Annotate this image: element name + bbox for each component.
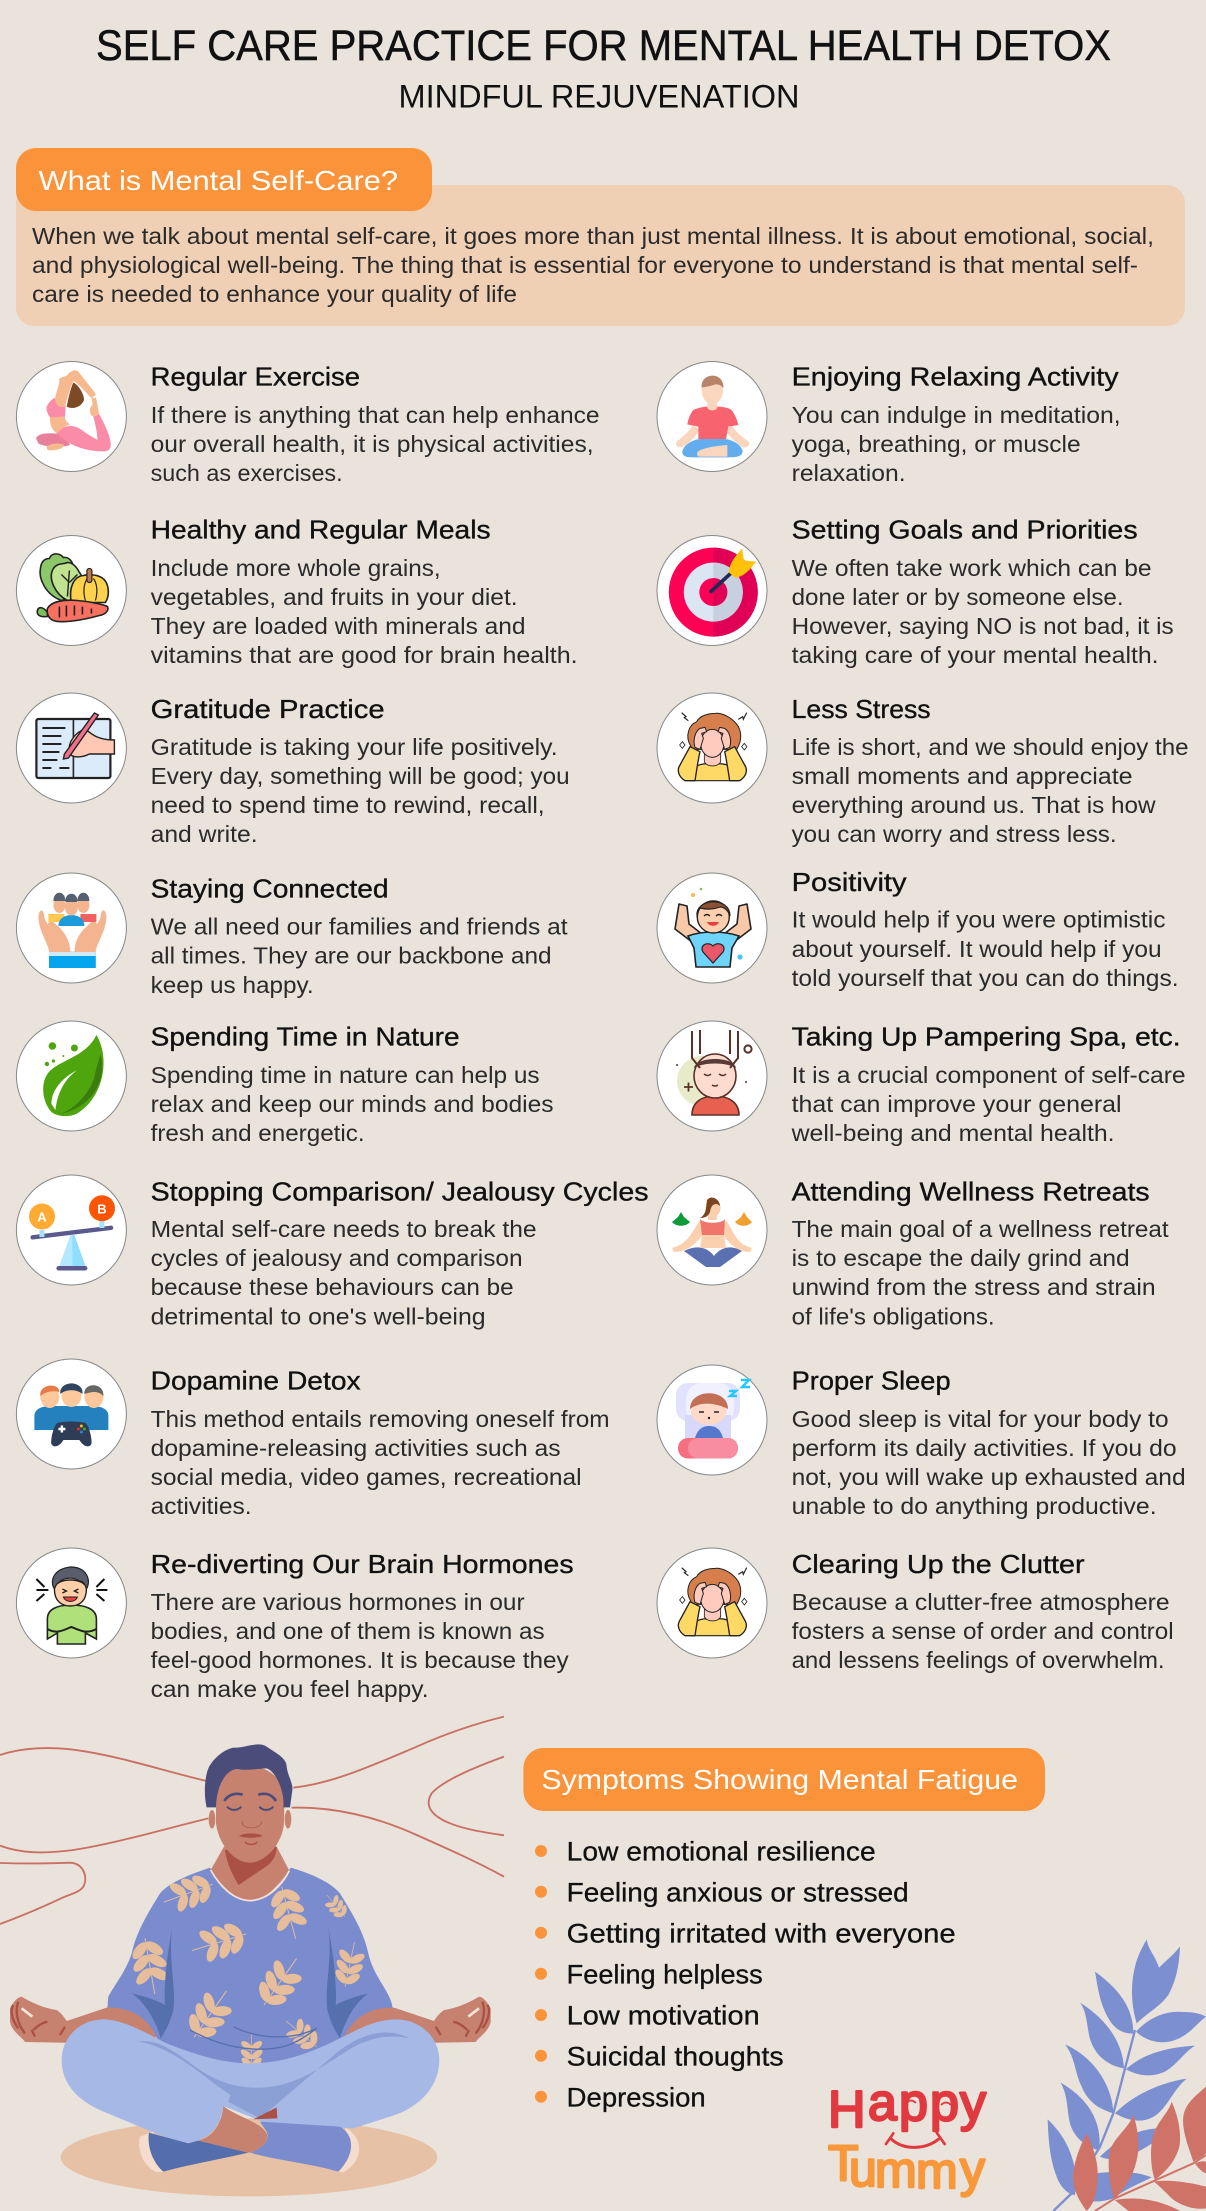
subtitle: MINDFUL REJUVENATION	[398, 78, 800, 114]
description: activities.	[151, 1493, 252, 1519]
list: symptoms	[535, 1837, 956, 2113]
description: Life is short, and we should enjoy the	[792, 734, 1189, 760]
description: We often take work which can be	[792, 555, 1152, 581]
heading: Clearing Up the Clutter	[792, 1549, 1085, 1579]
icon: yoga pose	[36, 370, 111, 451]
heading: Enjoying Relaxing Activity	[792, 362, 1119, 392]
description: feel-good hormones. It is because they	[151, 1647, 569, 1673]
description: fresh and energetic.	[151, 1120, 365, 1146]
description: and write.	[151, 821, 258, 847]
description: well-being and mental health.	[791, 1120, 1115, 1146]
heading: Dopamine Detox	[151, 1366, 361, 1396]
description: told yourself that you can do things.	[792, 965, 1179, 991]
description	[151, 1589, 569, 1702]
description	[151, 402, 600, 486]
list: symptoms: Low motivation	[567, 2001, 760, 2031]
icon: journal and pen	[36, 713, 114, 778]
description: not, you will wake up exhausted and	[792, 1464, 1186, 1490]
description	[791, 1062, 1186, 1146]
pill heading: symptoms	[523, 1748, 1045, 1811]
description: our overall health, it is physical activities,	[151, 431, 594, 457]
logo: happy tummy	[828, 2074, 986, 2199]
description: Include more whole grains,	[151, 555, 441, 581]
icon: stressed person	[678, 713, 747, 781]
logo: happy tummy: Tummy	[828, 2135, 985, 2199]
heading: Healthy and Regular Meals	[151, 515, 491, 545]
description	[151, 914, 568, 998]
heading: Attending Wellness Retreats	[792, 1176, 1150, 1206]
icon: sleeping person	[676, 1380, 750, 1458]
description: and lessens feelings of overwhelm.	[792, 1647, 1165, 1673]
icon: balance scale: B	[97, 1201, 107, 1216]
description: vitamins that are good for brain health.	[151, 642, 578, 668]
description	[792, 1589, 1174, 1673]
icon: cheering person	[675, 888, 751, 967]
description: unwind from the stress and strain	[792, 1274, 1156, 1300]
description	[151, 1216, 537, 1330]
icon: vegetables	[37, 554, 108, 622]
description	[792, 734, 1189, 847]
description: relaxation.	[792, 460, 906, 486]
description: such as exercises.	[151, 460, 343, 486]
heading: Setting Goals and Priorities	[792, 515, 1138, 545]
item: regular exercise	[16, 362, 600, 486]
description: You can indulge in meditation,	[792, 402, 1121, 428]
description	[792, 1216, 1169, 1330]
list: symptoms: Depression	[567, 2083, 706, 2113]
item: proper sleep	[657, 1365, 1186, 1519]
description: everything around us. That is how	[792, 792, 1156, 818]
item: clearing up the clutter	[657, 1548, 1174, 1673]
heading: Regular Exercise	[151, 362, 360, 392]
description: It would help if you were optimistic	[792, 906, 1166, 932]
heading: what is mental self-care: What is Mental Self-Care?	[38, 165, 398, 196]
description: taking care of your mental health.	[792, 642, 1159, 668]
intro text	[32, 223, 1154, 307]
item: healthy and regular meals	[16, 515, 578, 668]
description: need to spend time to rewind, recall,	[151, 792, 545, 818]
list: symptoms: Getting irritated with everyone	[567, 1919, 956, 1949]
list: symptoms: Low emotional resilience	[567, 1837, 876, 1867]
item: staying connected	[16, 873, 568, 998]
list: symptoms: Feeling helpless	[567, 1960, 763, 1990]
icon: target with arrow	[669, 548, 758, 637]
list: symptoms: Feeling anxious or stressed	[567, 1878, 909, 1908]
description: There are various hormones in our	[151, 1589, 525, 1615]
description: They are loaded with minerals and	[151, 613, 526, 639]
logo: happy tummy: Happy	[828, 2074, 986, 2139]
panel: what is mental self-care	[16, 148, 1185, 326]
description: all times. They are our backbone and	[151, 943, 552, 969]
item: pampering spa	[657, 1021, 1186, 1146]
description	[151, 555, 578, 668]
description	[792, 906, 1179, 991]
description: Mental self-care needs to break the	[151, 1216, 537, 1242]
icon: balance scale: A	[37, 1210, 47, 1224]
description: about yourself. It would help if you	[792, 936, 1162, 962]
description	[792, 402, 1121, 486]
description: The main goal of a wellness retreat	[792, 1216, 1169, 1242]
heading: Taking Up Pampering Spa, etc.	[792, 1022, 1181, 1052]
description: is to escape the daily grind and	[792, 1245, 1130, 1271]
intro text: care is needed to enhance your quality of life	[32, 281, 517, 307]
heading: Spending Time in Nature	[151, 1022, 460, 1052]
description: If there is anything that can help enhance	[151, 402, 600, 428]
description: fosters a sense of order and control	[792, 1618, 1174, 1644]
description: We all need our families and friends at	[151, 914, 568, 940]
description: yoga, breathing, or muscle	[792, 431, 1081, 457]
description	[792, 555, 1174, 668]
description: can make you feel happy.	[151, 1676, 429, 1702]
item: attending wellness retreats	[657, 1175, 1169, 1330]
description: Because a clutter-free atmosphere	[792, 1589, 1170, 1615]
heading: Positivity	[792, 867, 907, 897]
description: social media, video games, recreational	[151, 1464, 582, 1490]
heading: Re-diverting Our Brain Hormones	[151, 1549, 574, 1579]
item: enjoying relaxing activity	[657, 362, 1121, 486]
description: Good sleep is vital for your body to	[792, 1406, 1169, 1432]
icon: stressed person	[678, 1568, 747, 1636]
description: This method entails removing oneself from	[151, 1406, 610, 1432]
item: dopamine detox	[16, 1359, 610, 1519]
icon: woman meditating with lotus	[672, 1198, 752, 1267]
intro text: When we talk about mental self-care, it goes more than just mental illness. It is about emotional, social,	[32, 223, 1154, 249]
description: you can worry and stress less.	[792, 821, 1117, 847]
title: SELF CARE PRACTICE FOR MENTAL HEALTH DETOX	[96, 22, 1111, 70]
icon: balance scale	[29, 1195, 115, 1270]
icon: happy man	[36, 1567, 107, 1644]
heading: Stopping Comparison/ Jealousy Cycles	[151, 1176, 649, 1206]
item: gratitude practice	[16, 693, 570, 847]
item: re-diverting brain hormones	[16, 1548, 574, 1702]
description: vegetables, and fruits in your diet.	[151, 584, 518, 610]
description	[151, 734, 570, 847]
description: detrimental to one's well-being	[151, 1304, 486, 1330]
item: setting goals and priorities	[657, 515, 1174, 668]
heading: Proper Sleep	[792, 1366, 951, 1396]
description: perform its daily activities. If you do	[792, 1435, 1177, 1461]
description: Spending time in nature can help us	[151, 1062, 540, 1088]
icon: people in hands	[38, 893, 106, 968]
heading: Less Stress	[792, 694, 931, 724]
item: spending time in nature	[16, 1021, 554, 1146]
description: small moments and appreciate	[792, 763, 1133, 789]
icon: gamers with controller	[34, 1383, 108, 1446]
description: relax and keep our minds and bodies	[151, 1091, 554, 1117]
intro text: and physiological well-being. The thing that is essential for everyone to understand is that mental self-	[32, 252, 1138, 278]
description: unable to do anything productive.	[792, 1493, 1157, 1519]
icon: head massage	[676, 1030, 752, 1115]
description	[792, 1406, 1186, 1519]
description: that can improve your general	[792, 1091, 1122, 1117]
illustration: meditating man	[0, 1717, 504, 2196]
icon: green leaf	[43, 1035, 104, 1116]
description	[151, 1406, 610, 1519]
icon: seated meditation	[676, 376, 749, 457]
description: It is a crucial component of self-care	[792, 1062, 1186, 1088]
description: of life's obligations.	[792, 1304, 995, 1330]
description: cycles of jealousy and comparison	[151, 1245, 523, 1271]
pill heading: symptoms: Symptoms Showing Mental Fatigue	[541, 1764, 1018, 1795]
description: keep us happy.	[151, 972, 314, 998]
description: done later or by someone else.	[792, 584, 1124, 610]
description: because these behaviours can be	[151, 1274, 514, 1300]
item: positivity	[657, 867, 1179, 991]
description: bodies, and one of them is known as	[151, 1618, 545, 1644]
description: However, saying NO is not bad, it is	[792, 613, 1174, 639]
heading: Staying Connected	[151, 874, 389, 904]
item: less stress	[657, 693, 1189, 847]
description: Every day, something will be good; you	[151, 763, 570, 789]
item: stopping comparison	[16, 1175, 649, 1330]
description: dopamine-releasing activities such as	[151, 1435, 561, 1461]
decoration: foliage	[1048, 1939, 1206, 2211]
list: symptoms: Suicidal thoughts	[567, 2042, 784, 2072]
description: Gratitude is taking your life positively.	[151, 734, 558, 760]
description	[151, 1062, 554, 1146]
heading: Gratitude Practice	[151, 694, 385, 724]
